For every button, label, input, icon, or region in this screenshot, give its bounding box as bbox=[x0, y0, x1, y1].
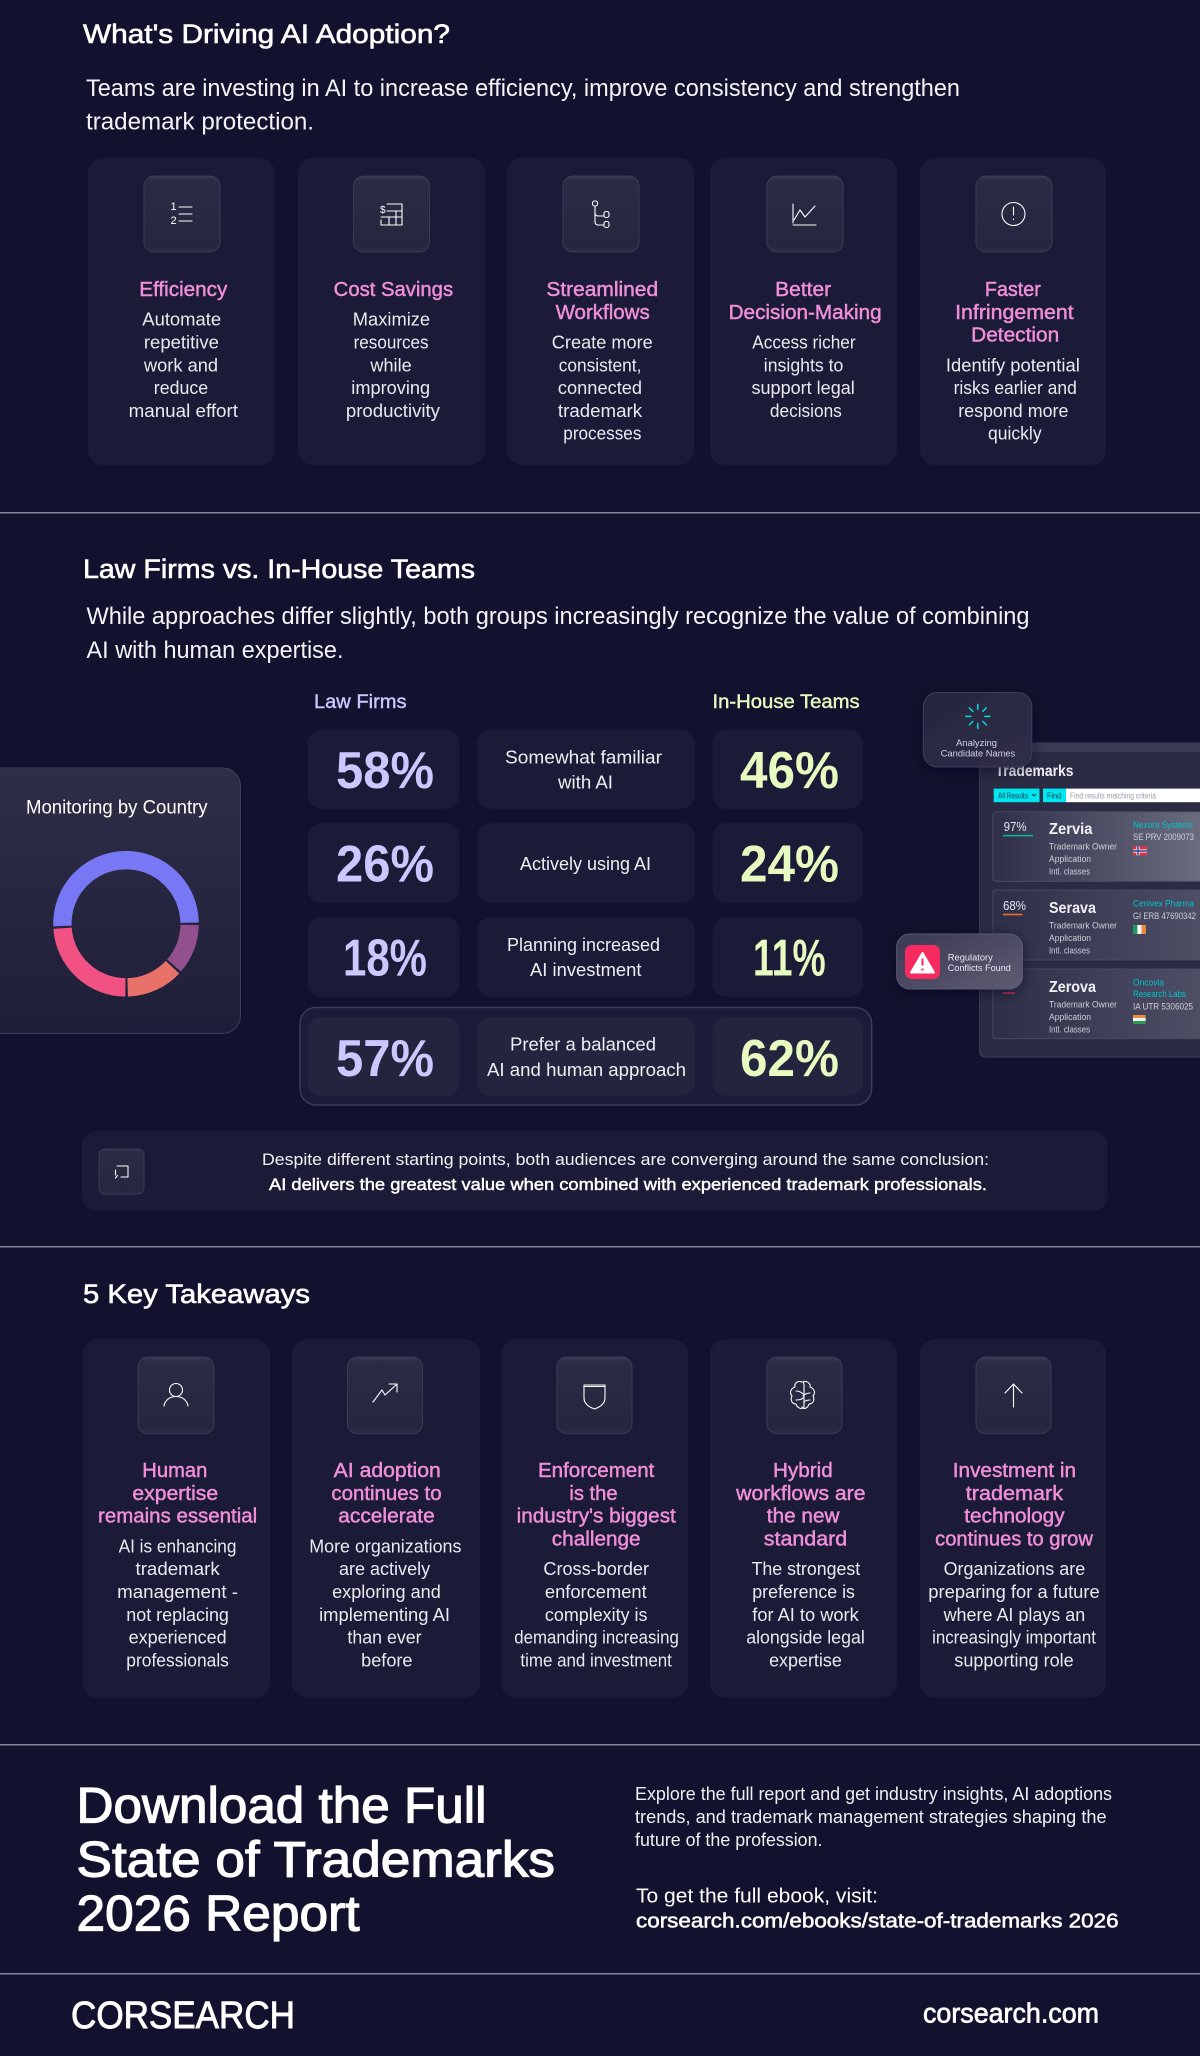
result row: Zervia: Trademark Owner bbox=[1049, 842, 1117, 853]
card: Enforcement: demanding increasing bbox=[514, 1628, 679, 1648]
card: Hybrid workflows: the new bbox=[767, 1506, 840, 1528]
card: AI adoption: are actively bbox=[339, 1559, 430, 1579]
flag: India bbox=[1133, 1015, 1146, 1024]
card: Human expertise: Human bbox=[142, 1460, 207, 1482]
intro text bbox=[86, 603, 1030, 664]
description text: trends, and trademark management strategies shaping the bbox=[635, 1807, 1107, 1827]
intro text: Teams are investing in AI to increase efficiency, improve consistency and strengthen bbox=[86, 75, 960, 102]
badge: regulatory conflicts found: Conflicts Found bbox=[948, 963, 1011, 974]
card: AI adoption: accelerate bbox=[338, 1506, 435, 1528]
heading: Law Firms vs. In-House Teams: Law Firms vs. In-House Teams bbox=[83, 554, 475, 584]
search bar: All Results bbox=[998, 791, 1028, 801]
card: Enforcement: enforcement bbox=[545, 1582, 647, 1602]
result row: Zerova: Zerova bbox=[1049, 979, 1096, 996]
row: somewhat familiar with AI bbox=[308, 730, 863, 809]
card: Investment in trademark technology bbox=[920, 1339, 1106, 1698]
result row: Zervia: Intl. classes bbox=[1049, 867, 1090, 878]
card: Faster Infringement Detection: Infringement bbox=[955, 302, 1074, 324]
card: Efficiency: Efficiency bbox=[139, 279, 227, 301]
card: Hybrid workflows: alongside legal bbox=[746, 1628, 865, 1648]
card: Human expertise bbox=[83, 1339, 270, 1698]
card: Cost Savings: improving bbox=[351, 378, 430, 398]
card: Human expertise: AI is enhancing bbox=[119, 1536, 236, 1556]
icon: callout square bbox=[99, 1149, 144, 1194]
card: Human expertise: professionals bbox=[126, 1650, 229, 1670]
search bar: Find results matching criteria bbox=[1070, 792, 1156, 801]
card: Cost Savings: while bbox=[369, 355, 412, 375]
card: AI adoption: AI adoption bbox=[334, 1460, 441, 1482]
heading: Download the Full State of Trademarks 2026 Report bbox=[76, 1778, 555, 1942]
card: Efficiency: repetitive bbox=[144, 332, 219, 352]
card: Cost Savings: resources bbox=[354, 332, 429, 352]
footer bbox=[71, 1995, 1099, 2037]
result row: Zervia: Zervia bbox=[1049, 821, 1093, 838]
card: Better Decision-Making: Decision-Making bbox=[729, 302, 882, 324]
card: Hybrid workflows: expertise bbox=[769, 1650, 842, 1670]
badge: analyzing candidate names bbox=[923, 692, 1032, 767]
icon: up arrow bbox=[976, 1357, 1051, 1434]
row: actively using AI bbox=[308, 823, 863, 903]
card: Streamlined Workflows: Workflows bbox=[556, 302, 650, 324]
column label: In-House Teams: In-House Teams bbox=[712, 692, 860, 713]
result row: Serava: Serava bbox=[1049, 900, 1096, 917]
card: Efficiency: work and bbox=[143, 355, 218, 375]
card: Enforcement: industry's biggest bbox=[517, 1506, 676, 1528]
flag: Norway bbox=[1133, 846, 1147, 855]
result row: Zerova: Oncovia bbox=[1133, 978, 1165, 989]
section: law firms vs in-house teams bbox=[0, 554, 1200, 1211]
card: Efficiency bbox=[88, 158, 275, 465]
row: planning increased AI investment: 18% bbox=[343, 930, 427, 988]
card: Investment in trademark technology: where AI plays an bbox=[943, 1605, 1085, 1625]
intro text: AI with human expertise. bbox=[86, 637, 344, 664]
result row: Serava: Intl. classes bbox=[1049, 946, 1090, 956]
intro text bbox=[86, 75, 960, 136]
heading: Download the Full State of Trademarks 2026 Report: State of Trademarks bbox=[76, 1832, 555, 1888]
section: download call to action bbox=[76, 1778, 1119, 1942]
panel: monitoring by country bbox=[0, 768, 240, 1034]
icon: brain bbox=[767, 1357, 842, 1434]
panel: monitoring by country: Monitoring by Country bbox=[26, 798, 208, 818]
card: Enforcement: is the bbox=[569, 1483, 618, 1505]
card: Efficiency: reduce bbox=[154, 378, 208, 398]
card: AI adoption: exploring and bbox=[332, 1582, 441, 1602]
card: Enforcement: Enforcement bbox=[538, 1460, 655, 1482]
icon: trend arrow bbox=[348, 1357, 422, 1434]
card: Human expertise: experienced bbox=[129, 1628, 227, 1648]
card: Streamlined Workflows: Streamlined bbox=[546, 279, 658, 301]
card: Faster Infringement Detection bbox=[920, 158, 1106, 465]
card: AI adoption: More organizations bbox=[309, 1536, 462, 1556]
search bar: Find bbox=[1047, 791, 1061, 801]
result row: Zerova bbox=[993, 969, 1200, 1039]
card: Cost Savings: Cost Savings bbox=[334, 279, 453, 301]
card: Streamlined Workflows: connected bbox=[558, 378, 642, 398]
intro text: While approaches differ slightly, both groups increasingly recognize the value of combining bbox=[86, 603, 1030, 630]
icon: numbered list: 2 bbox=[170, 215, 177, 227]
card: Investment in trademark technology: Organizations are bbox=[944, 1559, 1085, 1579]
card: Enforcement: complexity is bbox=[545, 1605, 648, 1625]
card: Enforcement: Cross-border bbox=[543, 1559, 649, 1579]
card: Human expertise: trademark bbox=[136, 1559, 221, 1579]
logo: CORSEARCH: CORSEARCH bbox=[71, 1995, 295, 2037]
ebook link: corsearch.com/ebooks/state-of-trademarks 2026 bbox=[636, 1910, 1119, 1932]
row: actively using AI: Actively using AI bbox=[520, 854, 651, 874]
row: somewhat familiar with AI: 58% bbox=[336, 742, 434, 800]
card: Faster Infringement Detection: Faster bbox=[985, 279, 1041, 301]
panel: trademarks results: Trademarks bbox=[996, 763, 1074, 780]
card: Faster Infringement Detection: Identify potential bbox=[946, 355, 1080, 375]
row: highlighted balanced approach bbox=[300, 1008, 872, 1105]
card: Better Decision-Making: decisions bbox=[770, 401, 842, 421]
card: Faster Infringement Detection: respond more bbox=[958, 401, 1068, 421]
card: AI adoption: than ever bbox=[347, 1628, 422, 1648]
card: Streamlined Workflows bbox=[507, 158, 694, 465]
row: planning increased AI investment: AI investment bbox=[530, 960, 642, 980]
card: Faster Infringement Detection: Detection bbox=[971, 325, 1059, 347]
icon: warning triangle bbox=[905, 945, 940, 979]
card: Cost Savings: productivity bbox=[346, 401, 440, 421]
callout: converging conclusion bbox=[82, 1131, 1108, 1211]
badge: regulatory conflicts found bbox=[897, 934, 1022, 989]
card: Enforcement bbox=[501, 1339, 688, 1698]
callout: converging conclusion: AI delivers the greatest value when combined with experienced trademark professionals. bbox=[269, 1175, 987, 1194]
card: Better Decision-Making: insights to bbox=[764, 355, 843, 375]
row: planning increased AI investment bbox=[308, 917, 863, 997]
result row: Zerova: Trademark Owner bbox=[1049, 999, 1117, 1010]
card: Faster Infringement Detection: quickly bbox=[988, 424, 1042, 444]
result row: Zerova: Research Labs bbox=[1133, 989, 1186, 1000]
row: somewhat familiar with AI: Somewhat familiar bbox=[505, 748, 662, 768]
heading: Download the Full State of Trademarks 2026 Report: 2026 Report bbox=[76, 1886, 360, 1942]
icon: line chart bbox=[767, 176, 843, 252]
card: Streamlined Workflows: Create more bbox=[552, 332, 653, 352]
column label: Law Firms: Law Firms bbox=[314, 692, 406, 713]
ebook link: To get the full ebook, visit: bbox=[636, 1886, 878, 1908]
card: Streamlined Workflows: processes bbox=[563, 424, 641, 444]
row: somewhat familiar with AI: 46% bbox=[740, 742, 839, 800]
card: Better Decision-Making: Better bbox=[775, 279, 831, 301]
badge: analyzing candidate names: Candidate Names bbox=[941, 748, 1015, 760]
intro text: trademark protection. bbox=[86, 108, 314, 136]
icon: person bbox=[138, 1357, 214, 1434]
card: Investment in trademark technology: Investment in bbox=[953, 1460, 1076, 1482]
card: Human expertise: management - bbox=[117, 1582, 238, 1602]
card: Hybrid workflows: standard bbox=[764, 1528, 847, 1550]
card: Investment in trademark technology: continues to grow bbox=[935, 1528, 1093, 1550]
row: highlighted balanced approach: 57% bbox=[336, 1030, 434, 1088]
callout: converging conclusion: Despite different starting points, both audiences are converging around the same conclusion: bbox=[262, 1150, 989, 1169]
row: highlighted balanced approach: AI and human approach bbox=[487, 1060, 686, 1080]
result row: Serava: Trademark Owner bbox=[1049, 920, 1117, 932]
card: AI adoption: continues to bbox=[331, 1483, 442, 1505]
card: Better Decision-Making: Access richer bbox=[752, 332, 856, 352]
description text: future of the profession. bbox=[635, 1830, 822, 1850]
card: Investment in trademark technology: increasingly important bbox=[932, 1628, 1096, 1648]
card: Hybrid workflows: preference is bbox=[752, 1582, 855, 1602]
result row: Serava: Application bbox=[1049, 933, 1091, 944]
badge: analyzing candidate names: Analyzing bbox=[956, 738, 997, 749]
card: Hybrid workflows bbox=[710, 1339, 897, 1698]
row: actively using AI: 24% bbox=[740, 835, 839, 893]
card: Human expertise: remains essential bbox=[98, 1506, 257, 1528]
card: Better Decision-Making: support legal bbox=[752, 378, 855, 398]
section: 5 key takeaways bbox=[83, 1279, 1106, 1698]
search bar bbox=[994, 789, 1200, 802]
card: Hybrid workflows: workflows are bbox=[735, 1483, 866, 1505]
row: planning increased AI investment: 11% bbox=[753, 930, 826, 988]
card: Enforcement: challenge bbox=[552, 1528, 641, 1550]
badge: regulatory conflicts found: Regulatory bbox=[948, 952, 993, 964]
result row: Zerova: Application bbox=[1049, 1012, 1091, 1023]
result row: Zerova: Intl. classes bbox=[1049, 1024, 1090, 1035]
icon: numbered list: 1 bbox=[170, 201, 177, 213]
card: Streamlined Workflows: trademark bbox=[558, 401, 643, 421]
icon: workflow tree bbox=[563, 176, 639, 252]
card: Human expertise: expertise bbox=[132, 1483, 218, 1505]
website: corsearch.com bbox=[923, 1998, 1099, 2029]
icon: cost table: $ bbox=[380, 205, 386, 216]
card: Hybrid workflows: Hybrid bbox=[773, 1460, 833, 1482]
description text bbox=[635, 1784, 1112, 1850]
card: Cost Savings bbox=[298, 158, 485, 465]
result row: Serava bbox=[993, 890, 1200, 960]
card: AI adoption: before bbox=[361, 1650, 412, 1670]
donut chart bbox=[62, 860, 190, 987]
result row: Zervia: 97% bbox=[1004, 819, 1027, 834]
icon: alert circle bbox=[976, 176, 1052, 252]
heading: What's Driving AI Adoption: What's Driving AI Adoption? bbox=[83, 19, 450, 49]
panel: trademarks results bbox=[980, 743, 1200, 1057]
card: Investment in trademark technology: supporting role bbox=[954, 1650, 1074, 1670]
card: Efficiency: Automate bbox=[142, 310, 221, 330]
result row: Zervia bbox=[993, 812, 1200, 881]
result row: Serava: 68% bbox=[1003, 898, 1026, 913]
card: Cost Savings: Maximize bbox=[353, 310, 430, 330]
card: Investment in trademark technology: technology bbox=[964, 1506, 1065, 1528]
row: planning increased AI investment: Planning increased bbox=[507, 935, 660, 955]
ebook link bbox=[636, 1886, 1119, 1932]
card: AI adoption: implementing AI bbox=[319, 1605, 450, 1625]
card: Human expertise: not replacing bbox=[126, 1605, 229, 1625]
row: somewhat familiar with AI: with AI bbox=[557, 772, 613, 792]
description text: Explore the full report and get industry insights, AI adoptions bbox=[635, 1784, 1112, 1804]
card: Hybrid workflows: for AI to work bbox=[752, 1605, 860, 1625]
icon: cost table bbox=[354, 176, 430, 252]
card: Hybrid workflows: The strongest bbox=[752, 1559, 860, 1579]
result row: Zervia: Application bbox=[1049, 854, 1091, 865]
card: Streamlined Workflows: consistent, bbox=[559, 355, 641, 375]
card: Faster Infringement Detection: risks earlier and bbox=[954, 378, 1077, 398]
row: actively using AI: 26% bbox=[336, 835, 434, 893]
flag: Ireland bbox=[1133, 925, 1146, 934]
heading: Download the Full State of Trademarks 2026 Report: Download the Full bbox=[76, 1778, 486, 1834]
card: Enforcement: time and investment bbox=[520, 1650, 672, 1670]
card: Efficiency: manual effort bbox=[129, 401, 238, 421]
icon: numbered list bbox=[144, 176, 220, 252]
section: what's driving AI adoption bbox=[83, 19, 1106, 465]
heading: 5 Key Takeaways: 5 Key Takeaways bbox=[83, 1279, 310, 1309]
card: Investment in trademark technology: trademark bbox=[966, 1483, 1064, 1505]
icon: shield bbox=[557, 1357, 632, 1434]
row: highlighted balanced approach: Prefer a balanced bbox=[510, 1034, 656, 1054]
card: AI adoption bbox=[292, 1339, 480, 1698]
row: highlighted balanced approach: 62% bbox=[740, 1030, 839, 1088]
card: Better Decision-Making bbox=[710, 158, 897, 465]
card: Investment in trademark technology: preparing for a future bbox=[928, 1582, 1100, 1602]
